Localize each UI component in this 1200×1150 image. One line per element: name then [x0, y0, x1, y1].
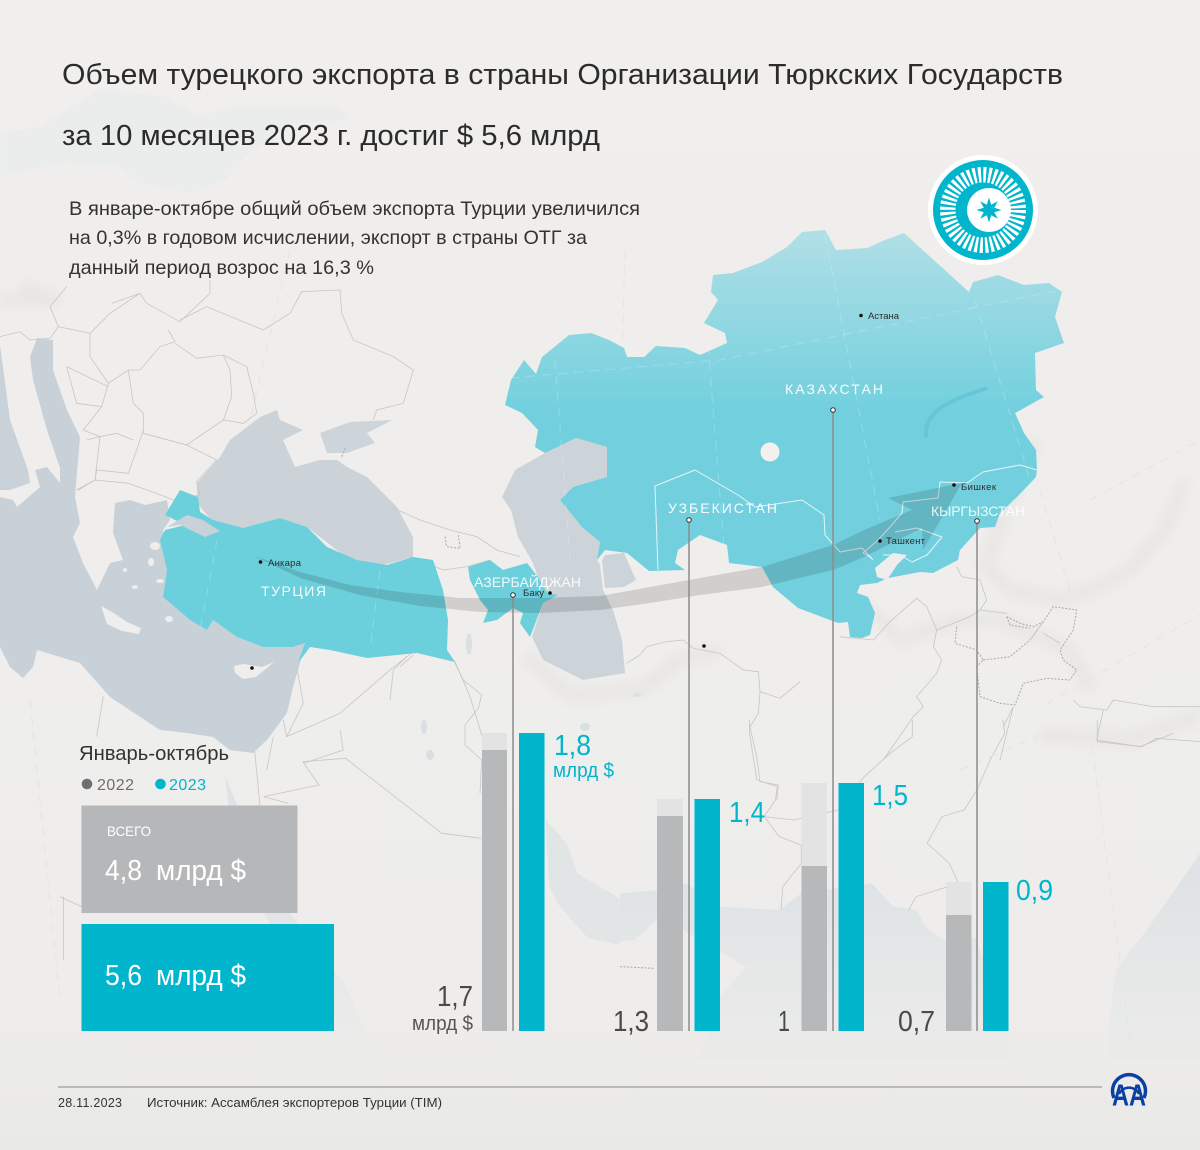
panel: total 2022: [82, 806, 298, 913]
icon: Anadolu Agency logo: AA: [1112, 1078, 1146, 1112]
map: Mediterranean and Adriatic seas: [0, 338, 305, 753]
map: Persian Gulf: [546, 820, 620, 945]
map: Red Sea: [225, 775, 370, 1040]
bar chart: Kyrgyzstan: 0,9: [1016, 875, 1053, 907]
title: Объем турецкого экспорта в страны Организации Тюркских Государств: [62, 59, 1063, 91]
country labels: УЗБЕКИСТАН: [668, 500, 777, 516]
bar chart: Uzbekistan: 1,4: [729, 797, 765, 829]
footer source: Источник: Ассамблея экспортеров Турции (TIM): [147, 1096, 442, 1110]
map: Sea of Marmara: [167, 515, 220, 537]
footer date: 28.11.2023: [58, 1096, 122, 1110]
legend: [79, 743, 229, 794]
bar chart: Azerbaijan: [412, 593, 614, 1035]
map: Uzbekistan border: [655, 470, 873, 570]
legend title: Январь-октябрь: [79, 743, 229, 765]
map: Kazakhstan, Uzbekistan, Kyrgyzstan highlighted area: [505, 230, 1064, 638]
country labels: [261, 381, 1025, 599]
intro text: В январе-октябре общий объем экспорта Турции увеличился: [69, 198, 640, 220]
map: Azerbaijan highlighted: [468, 560, 558, 637]
map: Central Asia shape: [505, 230, 1064, 638]
city labels: Астана: [868, 311, 900, 322]
map: Crete: [101, 606, 141, 634]
bar chart: Kazakhstan: [778, 408, 908, 1038]
map: Turkey shape: [160, 490, 455, 663]
city labels: Анкара: [268, 558, 302, 569]
bar chart: Azerbaijan: млрд $: [412, 1013, 473, 1035]
map: graticule: [30, 250, 1200, 1040]
map: Baltic sea, faded: [0, 90, 348, 193]
panel: total 2023: 5,6: [105, 960, 142, 992]
city labels: Ташкент: [886, 536, 926, 547]
map: Cyprus: [234, 662, 274, 679]
country labels: КЫРГЫЗСТАН: [931, 503, 1025, 519]
map: Kara-Bogaz lake: [602, 553, 636, 588]
map: Caspian Sea: [502, 438, 625, 680]
country labels: ТУРЦИЯ: [261, 583, 326, 599]
legend 2022: 2022: [97, 777, 134, 794]
title: за 10 месяцев 2023 г. достиг $ 5,6 млрд: [62, 120, 600, 152]
bar chart: Kazakhstan: 1,5: [872, 780, 908, 812]
title: [62, 59, 1063, 152]
country labels: АЗЕРБАЙДЖАН: [474, 573, 581, 590]
map: Ferghana notch: [875, 553, 907, 580]
panel: total 2023: млрд $: [156, 960, 246, 992]
bar chart: Azerbaijan: 1,7: [437, 981, 473, 1013]
map: Tyrrhenian sea: [0, 345, 30, 490]
bar chart: Uzbekistan: [613, 518, 765, 1038]
map: lakes: [421, 633, 641, 760]
country labels: КАЗАХСТАН: [785, 381, 883, 397]
panel: total 2022: млрд $: [156, 855, 246, 887]
city labels: Бишкек: [961, 482, 997, 493]
icon: Organization of Turkic States emblem: [928, 155, 1038, 265]
map: Black Sea: [197, 410, 413, 565]
map: Balkhash lake: [926, 388, 987, 437]
map: country borders: [0, 250, 1200, 1040]
map: Bay of Bengal: [1108, 853, 1200, 1060]
legend 2023: 2023: [169, 777, 206, 794]
map: relief shading: [0, 285, 1200, 740]
bar chart: Kazakhstan: 1: [778, 1006, 790, 1038]
map: Turkey highlighted: [160, 490, 455, 663]
city labels: [250, 311, 997, 670]
city labels: Баку: [523, 588, 544, 599]
bar chart: Azerbaijan: млрд $: [553, 760, 614, 782]
map: Arabian Sea: [620, 883, 1008, 1060]
map: Aegean islands: [123, 542, 173, 622]
bar chart: Kyrgyzstan: 0,7: [898, 1006, 935, 1038]
map: Sea of Azov: [320, 420, 392, 453]
panel: total 2022: ВСЕГО: [107, 823, 151, 839]
bar chart: Azerbaijan: 1,8: [554, 730, 591, 762]
bar chart: Uzbekistan: 1,3: [613, 1006, 649, 1038]
intro text: [69, 198, 640, 279]
panel: total 2023: [82, 924, 334, 1031]
footer: [58, 1087, 1102, 1110]
panel: total 2022: 4,8: [105, 855, 142, 887]
bar chart: Kyrgyzstan: [898, 519, 1053, 1038]
intro text: на 0,3% в годовом исчислении, экспорт в страны ОТГ за: [69, 227, 587, 249]
map: Aral white spot: [760, 442, 780, 462]
map: Kyrgyzstan border: [863, 465, 1037, 558]
arrow: trade flow from Turkey to Central Asia: [252, 483, 962, 613]
intro text: данный период возрос на 16,3 %: [69, 257, 374, 279]
